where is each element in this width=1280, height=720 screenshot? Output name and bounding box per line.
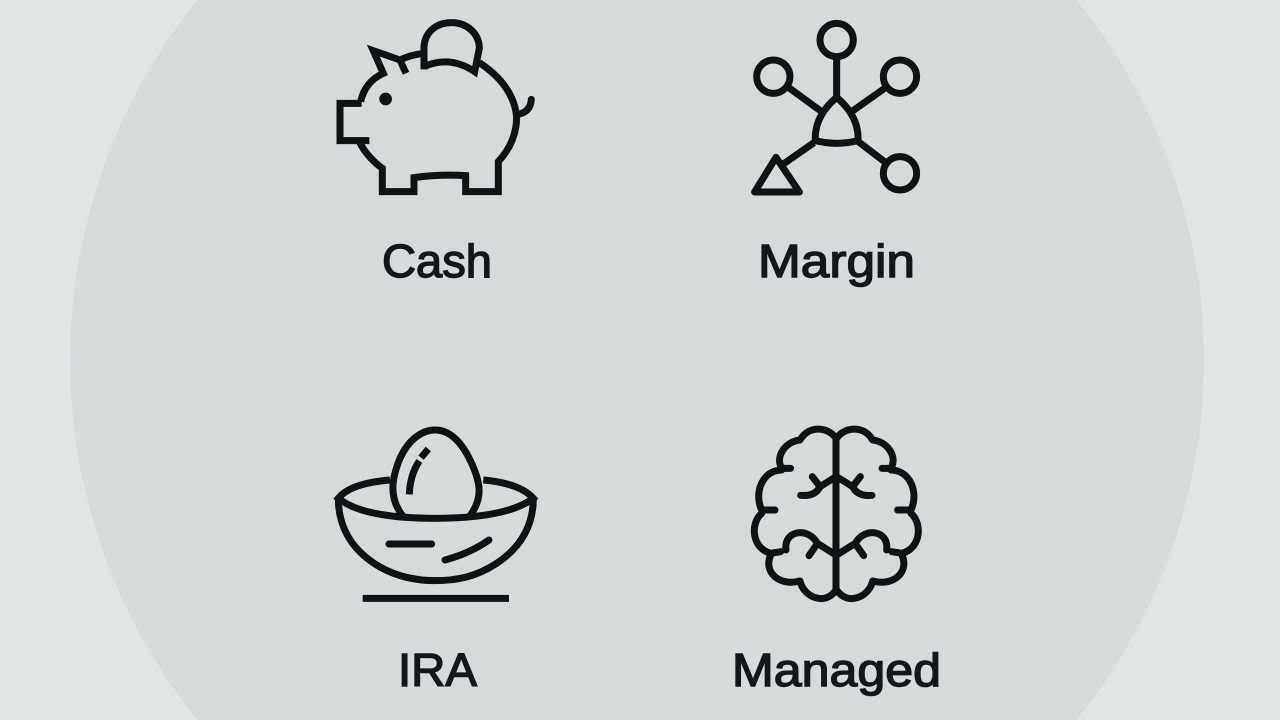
panel: cash	[340, 23, 531, 287]
icon: brain right hemisphere	[837, 429, 918, 599]
label: Cash: Cash	[382, 235, 492, 287]
icon: network of nodes	[755, 23, 917, 192]
panel: IRA	[338, 430, 533, 696]
icon: piggy bank with coin	[340, 23, 531, 192]
panel: margin	[755, 23, 917, 287]
icon: pig eye	[379, 93, 392, 105]
label: IRA: IRA	[398, 644, 477, 696]
label: Managed: Managed	[732, 644, 941, 696]
icon: brain	[754, 429, 918, 599]
panel: managed	[732, 429, 941, 696]
label: Margin: Margin	[758, 235, 915, 287]
icon: nest egg in bowl	[338, 430, 533, 598]
